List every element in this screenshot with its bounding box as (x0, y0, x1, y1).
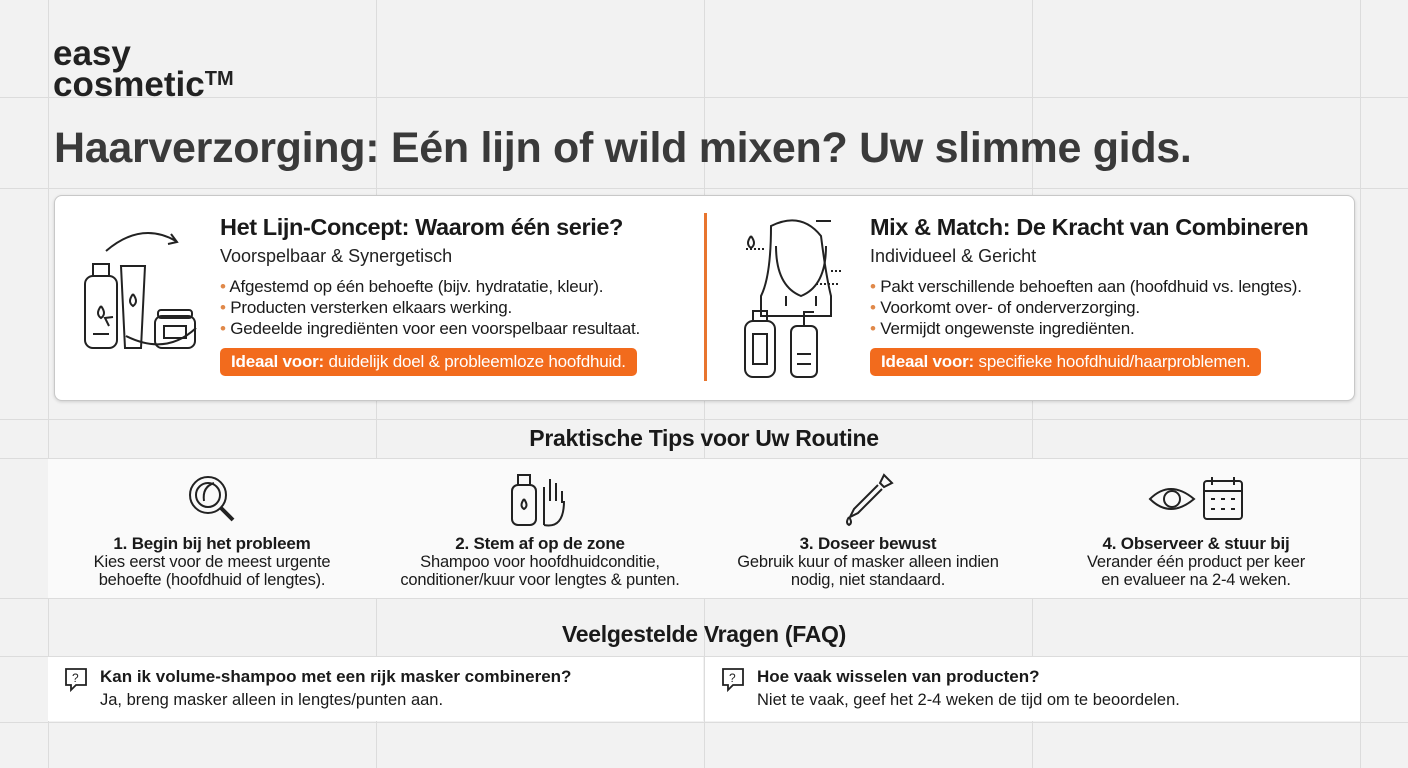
icon: mix hair (744, 219, 841, 378)
tip 3: 3. Doseer bewust (800, 534, 936, 553)
faq 2: Niet te vaak, geef het 2-4 weken de tijd om te beoordelen. (757, 691, 1180, 709)
panel: comparison card: Gedeelde ingrediënten voor een voorspelbaar resultaat. (230, 319, 640, 338)
heading: faq: Veelgestelde Vragen (FAQ) (562, 621, 846, 647)
faq 1: Ja, breng masker alleen in lengtes/punten aan. (100, 691, 443, 709)
heading: tips: Praktische Tips voor Uw Routine (529, 425, 879, 451)
logo: cosmeticTM (53, 65, 234, 104)
faq 1: Kan ik volume-shampoo met een rijk masker combineren? (100, 667, 571, 686)
tip 3: nodig, niet standaard. (791, 571, 945, 589)
panel: comparison card: Individueel & Gericht (870, 246, 1036, 266)
tip 3: Gebruik kuur of masker alleen indien (737, 553, 999, 571)
panel: comparison card: Pakt verschillende behoeften aan (hoofdhuid vs. lengtes). (880, 277, 1302, 296)
tip 1: Kies eerst voor de meest urgente (94, 553, 330, 571)
faq 1 (48, 657, 703, 721)
tip 3 (737, 473, 999, 589)
heading: lijn-concept: Het Lijn-Concept: Waarom één serie? (220, 214, 623, 240)
panel: comparison card (54, 195, 1355, 401)
panel: comparison card: Producten versterken elkaars werking. (230, 298, 512, 317)
logo (53, 34, 234, 104)
faq 2 (705, 657, 1360, 721)
tip 2 (400, 474, 680, 589)
faq 1: ? (72, 671, 79, 685)
tip 4: en evalueer na 2-4 weken. (1101, 571, 1291, 589)
tip 4 (1087, 477, 1305, 589)
tip 4: Verander één product per keer (1087, 553, 1305, 571)
panel: comparison card: Ideaal voor: specifieke hoofdhuid/haarproblemen. (881, 352, 1250, 371)
panel: comparison card: Voorspelbaar & Synergetisch (220, 246, 452, 266)
tip 2: conditioner/kuur voor lengtes & punten. (400, 571, 680, 589)
panel: comparison card: Voorkomt over- of onderverzorging. (880, 298, 1140, 317)
tip 2: 2. Stem af op de zone (455, 534, 625, 553)
tip 1: behoefte (hoofdhuid of lengtes). (99, 571, 325, 589)
icon: line products (84, 232, 197, 349)
faq 2: Hoe vaak wisselen van producten? (757, 667, 1039, 686)
logo: easy (53, 34, 131, 73)
tip 4: 4. Observeer & stuur bij (1102, 534, 1290, 553)
faq 2: ? (729, 671, 736, 685)
tip 2: Shampoo voor hoofdhuidconditie, (420, 553, 660, 571)
heading: mix & match: Mix & Match: De Kracht van Combineren (870, 214, 1308, 240)
panel: comparison card: Afgestemd op één behoefte (bijv. hydratatie, kleur). (229, 277, 603, 296)
title: Haarverzorging: Eén lijn of wild mixen? Uw slimme gids. (54, 124, 1192, 172)
tip 1 (94, 476, 330, 589)
tip 1: 1. Begin bij het probleem (113, 534, 311, 553)
panel: comparison card: Vermijdt ongewenste ingrediënten. (880, 319, 1135, 338)
panel: comparison card: Ideaal voor: duidelijk doel & probleemloze hoofdhuid. (231, 352, 626, 371)
